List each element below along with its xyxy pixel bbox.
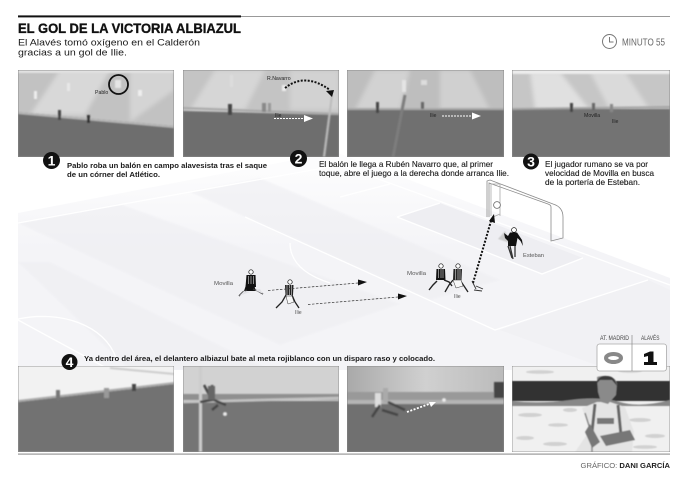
step 3 marker [523, 154, 539, 170]
player: Movilla (right) [429, 264, 452, 290]
photo 2 annotations [267, 76, 334, 122]
photo 4 labels [584, 113, 619, 125]
subtitle: gracias a un gol de Ilie. [18, 48, 127, 58]
bottom rule [18, 454, 670, 455]
run arrow: Ilie [308, 294, 407, 304]
photo 3 annotations: Ilie [430, 113, 437, 119]
icon: clock [602, 34, 616, 48]
step 4 text: Ya dentro del área, el delantero albiazul bate al meta rojiblanco con un disparo raso y colocado. [84, 354, 435, 363]
step 2 marker [290, 150, 307, 167]
step 3 text: de la portería de Esteban. [545, 178, 640, 187]
label: Movilla (right): Movilla [407, 271, 426, 277]
step 3 text: El jugador rumano se va por [545, 160, 648, 169]
credit: GRÁFICO: DANI GARCÍA [581, 461, 671, 470]
player: Movilla (left) [239, 270, 263, 296]
step 3 text: velocidad de Movilla en busca [545, 169, 655, 178]
shot arrow [472, 214, 495, 291]
photo 4 labels: Movilla [584, 113, 600, 119]
pitch illustration [18, 178, 670, 370]
step 3 text [545, 160, 655, 187]
scoreboard: AT. MADRID [600, 335, 629, 342]
photo 8: goal scorer portrait [512, 366, 670, 452]
subtitle: El Alavés tomó oxígeno en el Calderón [18, 38, 200, 48]
step 2 text: El balón le llega a Rubén Navarro que, al primer [319, 160, 493, 169]
step 2 text: toque, abre el juego a la derecha donde arranca Ilie. [319, 169, 509, 178]
photo 4 labels: Ilie [612, 119, 619, 125]
goal [487, 180, 563, 241]
step 1 marker [43, 152, 60, 169]
label: Pablo: Pablo [95, 90, 108, 96]
callout: circle around Pablo [109, 75, 128, 94]
label: Ilie (left): Ilie [295, 310, 302, 316]
photo 5 [18, 366, 174, 452]
step 4 marker: 4 [66, 354, 74, 370]
scoreboard: ALAVÉS [641, 335, 660, 342]
step 1 text: de un córner del Atlético. [67, 170, 160, 179]
step 1 marker: 1 [48, 152, 56, 168]
photo 6 [183, 366, 339, 452]
step 4 marker [62, 354, 78, 370]
photo 3 [347, 70, 504, 157]
label: Esteban: Esteban [523, 253, 544, 259]
top rule [18, 15, 670, 17]
run arrow: Movilla [268, 280, 367, 290]
scoreboard [597, 335, 666, 371]
photo 2 annotations: Ilie [275, 113, 282, 119]
photo 4 [512, 70, 670, 157]
photo 2 annotations: R.Navarro [267, 76, 291, 82]
subtitle [18, 38, 200, 58]
photo 1 [18, 70, 174, 157]
step 2 marker: 2 [295, 150, 303, 166]
player: Ilie (left) [276, 280, 299, 308]
photo 3 annotations [430, 112, 481, 120]
step 1 text [67, 161, 267, 179]
photo 2 [183, 70, 339, 157]
label: Ilie (right): Ilie [454, 294, 461, 300]
player: Ilie (right) [445, 264, 468, 292]
player: Esteban [498, 228, 523, 259]
step 1 text: Pablo roba un balón en campo alavesista tras el saque [67, 161, 267, 170]
minute label: MINUTO 55 [622, 36, 665, 48]
step 2 text [319, 160, 509, 178]
title: EL GOL DE LA VICTORIA ALBIAZUL [18, 20, 241, 36]
label: Movilla (left): Movilla [214, 281, 233, 287]
step 3 marker: 3 [527, 154, 535, 170]
ball in goal [494, 202, 500, 208]
photo 7 [347, 366, 504, 452]
